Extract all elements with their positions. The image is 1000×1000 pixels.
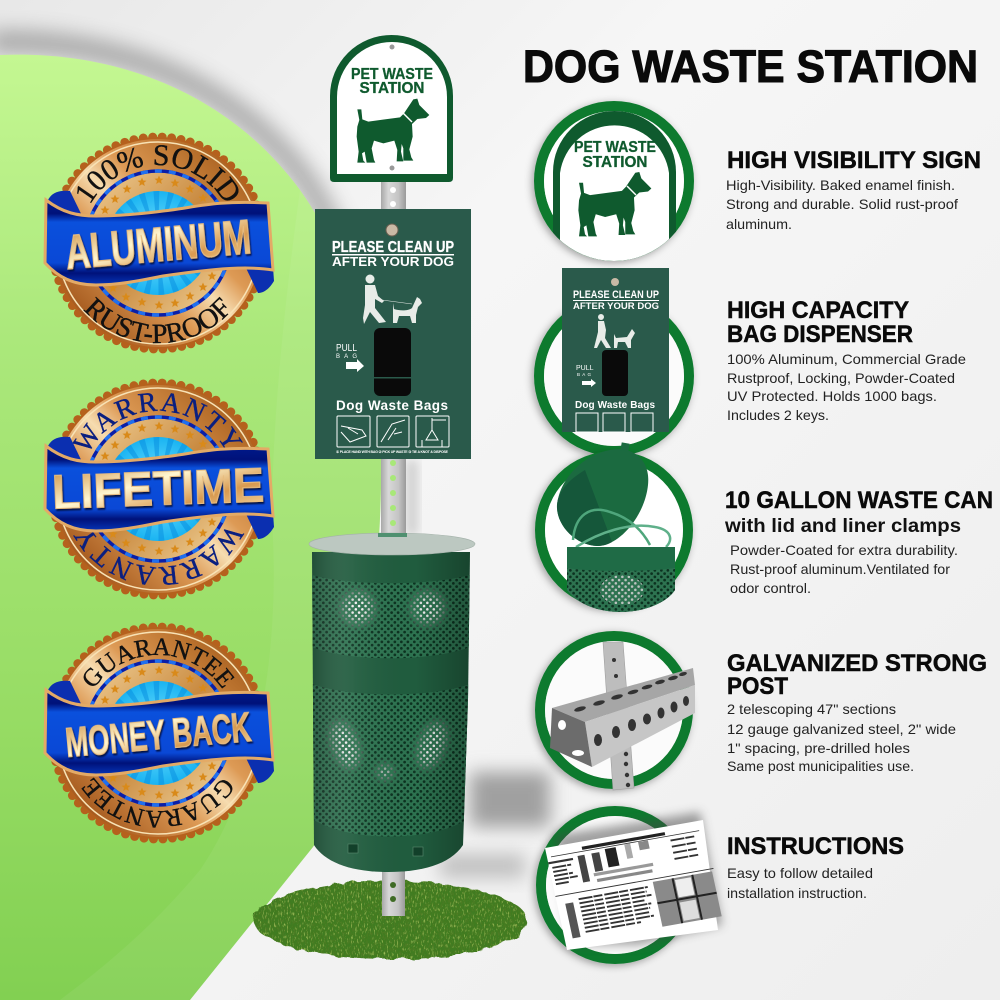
description: Same post municipalities use.	[727, 758, 914, 774]
feature: instructions	[541, 811, 904, 959]
icon: pull arrow	[346, 359, 364, 372]
description: aluminum.	[726, 216, 792, 232]
main bag dispenser: AFTER YOUR DOG	[332, 254, 454, 269]
dog waste bags label: Dog Waste Bags	[336, 398, 448, 413]
description: Easy to follow detailed	[727, 865, 873, 881]
lower post	[382, 860, 405, 916]
description: 12 gauge galvanized steel, 2" wide	[727, 721, 956, 737]
description: 2 telescoping 47" sections	[727, 701, 896, 717]
description	[727, 701, 956, 774]
circle image: sign: PET WASTE	[574, 139, 656, 156]
description	[726, 177, 958, 232]
upper post with holes	[381, 178, 406, 538]
circle image: sign	[539, 106, 689, 270]
heading: INSTRUCTIONS	[727, 833, 904, 860]
badge: lifetime warranty: LIFETIME	[51, 459, 265, 520]
description: High-Visibility. Baked enamel finish.	[726, 177, 955, 193]
can lid	[309, 533, 475, 555]
badge: money back guarantee	[44, 622, 275, 844]
circle image: dispenser: AFTER YOUR DOG	[573, 301, 659, 312]
badge: money back guarantee: GUARANTEE	[84, 638, 234, 688]
grass patch	[253, 881, 527, 959]
circle image: can with lid	[540, 442, 688, 612]
main bag dispenser: ① PLACE HAND WITH BAG ② PICK UP WASTE ③ TIE A KNOT & DISPOSE	[336, 449, 449, 454]
heading: POST	[727, 673, 788, 700]
circle image: post	[540, 636, 695, 790]
title: DOG WASTE STATION	[523, 41, 978, 92]
bag slot	[374, 328, 411, 396]
circle image: dispenser: Dog Waste Bags	[575, 400, 655, 411]
can body	[567, 547, 675, 612]
badge: 100% solid aluminum rust-proof: ALUMINUM	[63, 211, 253, 280]
description: UV Protected. Holds 1000 bags.	[727, 388, 937, 404]
lid	[557, 449, 648, 546]
main bag dispenser	[315, 209, 471, 459]
dispenser heading: PLEASE CLEAN UP	[332, 239, 454, 256]
badge: 100% solid aluminum rust-proof: RUST-PROOF	[83, 296, 228, 344]
see-through perforation highlights	[324, 584, 454, 786]
feature: high visibility sign	[539, 106, 981, 270]
description: Strong and durable. Solid rust-proof	[726, 196, 958, 212]
main arched sign: PET WASTE	[351, 66, 433, 83]
main bag dispenser: BAG	[336, 354, 357, 360]
badge: lifetime warranty: WARRANTY	[72, 393, 243, 449]
description: Rustproof, Locking, Powder-Coated	[727, 370, 955, 386]
description: installation instruction.	[727, 885, 867, 901]
circle image: sign: STATION	[582, 154, 648, 171]
circle image: dispenser: PLEASE CLEAN UP	[573, 289, 659, 301]
description: Powder-Coated for extra durability.	[730, 542, 958, 558]
green curved background shape	[0, 55, 381, 1000]
description: odor control.	[730, 580, 811, 596]
circle image: dispenser: BAG	[577, 372, 591, 377]
lighter outer band on green shape	[60, 190, 381, 1000]
circle image: instruction sheet	[541, 811, 724, 959]
instruction boxes	[337, 416, 449, 447]
badge: money back guarantee: GUARANTEE	[81, 778, 232, 828]
heading	[727, 650, 987, 700]
circle image: dispenser: PULL	[576, 365, 594, 372]
badge: lifetime warranty: WARRANTY	[73, 529, 244, 585]
heading: GALVANIZED STRONG	[727, 650, 987, 677]
main arched sign: STATION	[360, 80, 424, 97]
liner rings	[573, 510, 650, 545]
badge: 100% solid aluminum rust-proof	[44, 132, 275, 354]
feature: high capacity bag dispenser	[539, 268, 966, 451]
waste can	[305, 533, 475, 880]
main arched sign	[330, 35, 453, 182]
lock	[386, 224, 398, 236]
heading: HIGH CAPACITY	[727, 297, 909, 324]
description: Includes 2 keys.	[727, 407, 829, 423]
description	[727, 351, 966, 423]
icon: person walking dog	[363, 274, 422, 324]
feature: 10 gallon waste can	[540, 442, 993, 612]
badge: lifetime warranty	[44, 378, 275, 600]
description: 1" spacing, pre-drilled holes	[727, 740, 910, 756]
background soft shadows	[0, 42, 550, 878]
circle image: dispenser	[539, 268, 689, 451]
heading: HIGH VISIBILITY SIGN	[727, 147, 981, 174]
description: 100% Aluminum, Commercial Grade	[727, 351, 966, 367]
badge: 100% solid aluminum rust-proof: 100% SOLID	[77, 145, 239, 204]
subheading: with lid and liner clamps	[724, 516, 961, 537]
heading: BAG DISPENSER	[727, 321, 913, 348]
description	[730, 542, 958, 596]
description: Rust-proof aluminum.Ventilated for	[730, 561, 950, 577]
badge: money back guarantee: MONEY BACK	[63, 703, 253, 766]
heading	[727, 297, 913, 348]
description	[727, 865, 873, 901]
pull bag label: PULL	[336, 343, 357, 354]
feature: galvanized strong post	[540, 636, 987, 790]
